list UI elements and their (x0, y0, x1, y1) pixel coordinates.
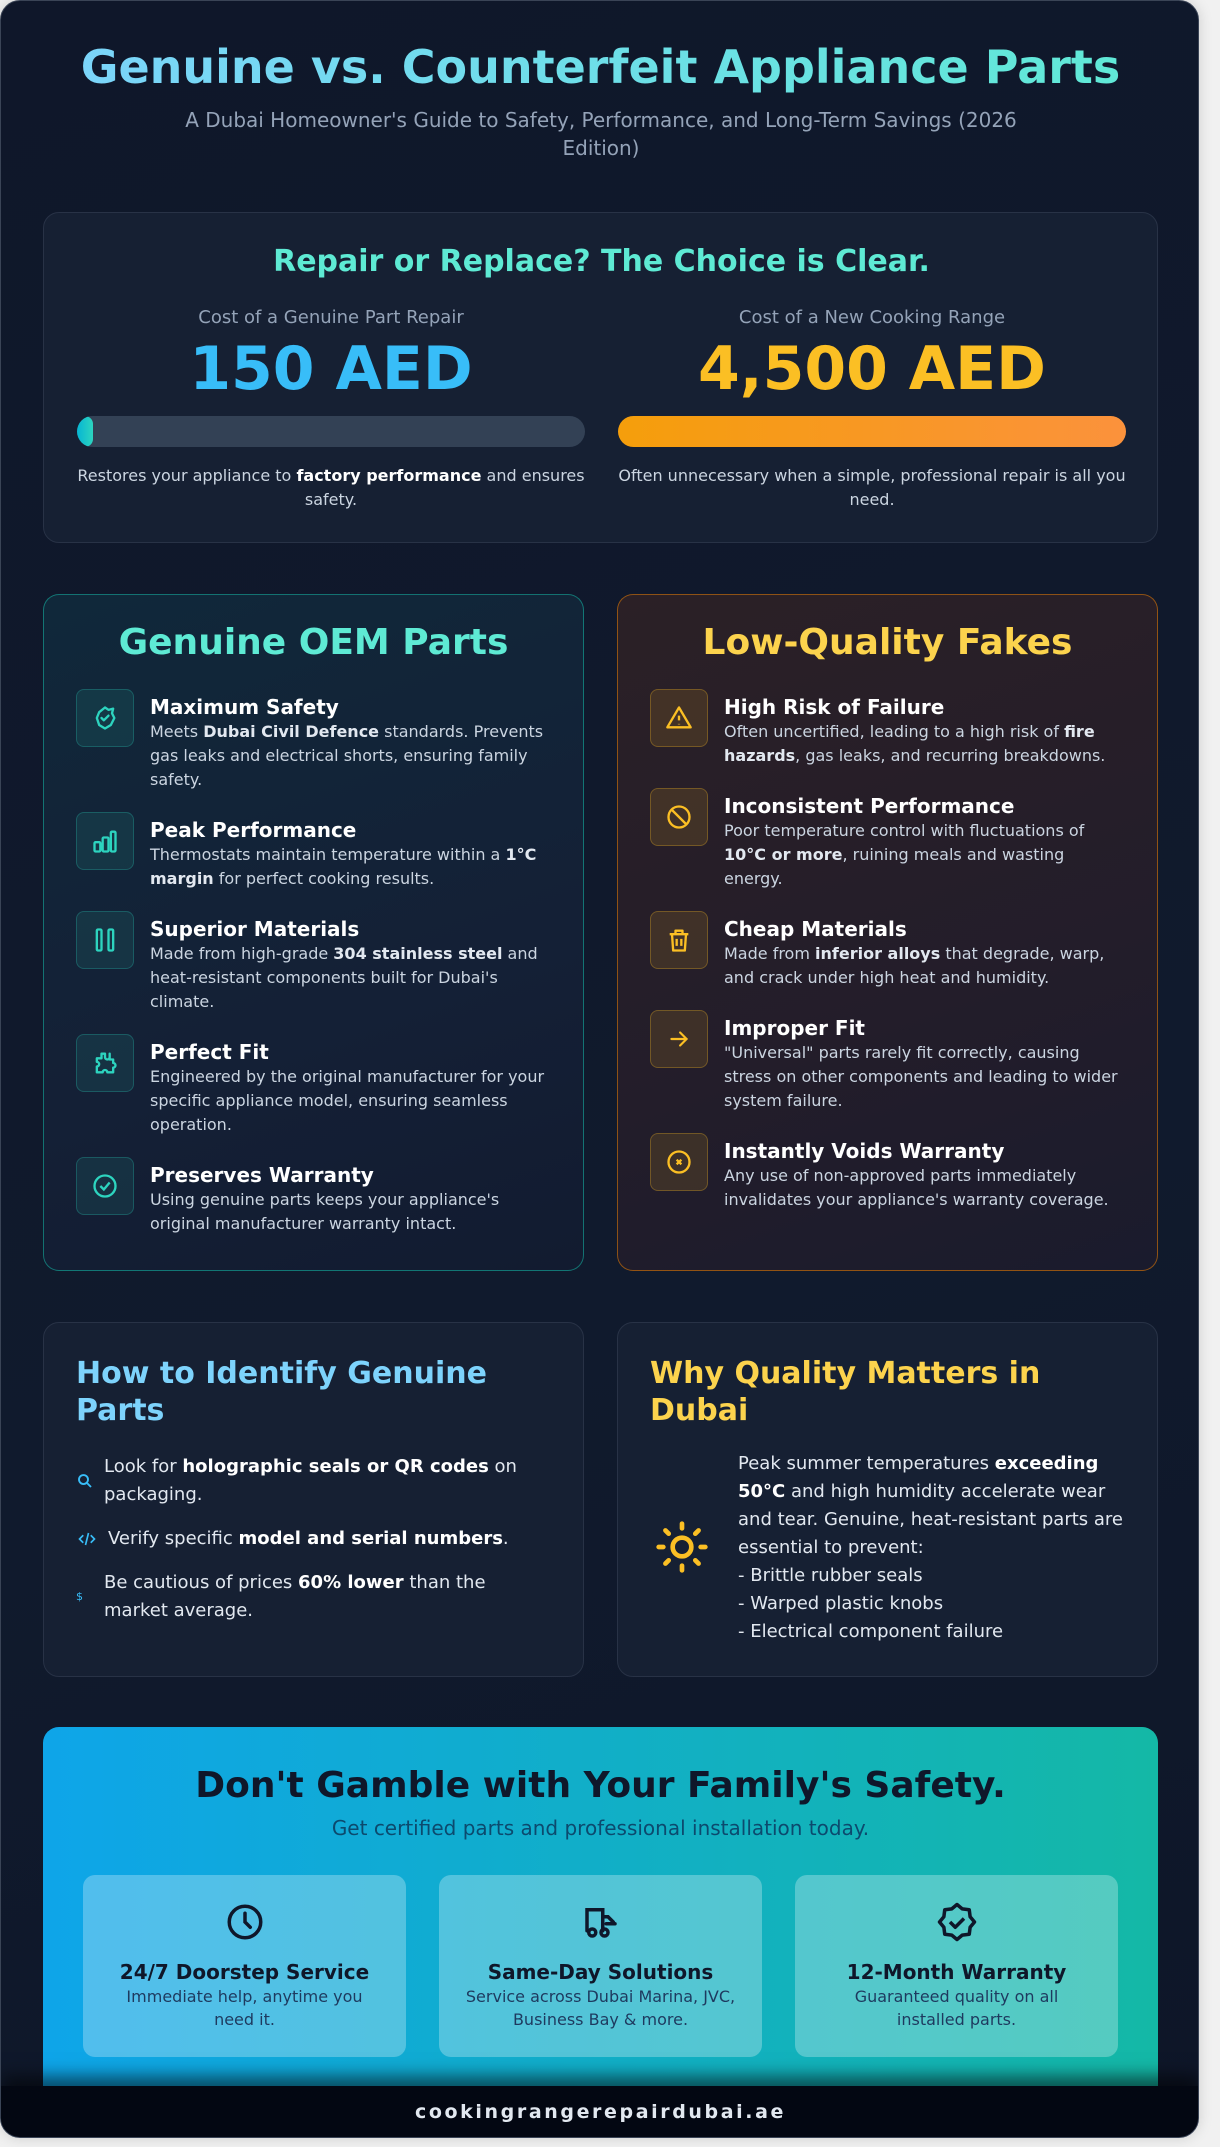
item: high risk: Often uncertified, leading to a high risk of fire hazards, gas leaks, and recurring breakdowns. (724, 722, 1105, 765)
column: genuine repair cost: Cost of a Genuine Part Repair (198, 307, 464, 328)
list item: serial numbers: Verify specific model and serial numbers. (108, 1528, 509, 1549)
card: doorstep service (83, 1875, 406, 2057)
item: cheap materials: Made from inferior alloys that degrade, warp, and crack under high heat and humidity. (724, 944, 1104, 987)
item: improper fit (650, 1010, 1118, 1110)
item: maximum safety (76, 689, 543, 789)
list item: seals: Look for holographic seals or QR codes on packaging. (104, 1456, 517, 1505)
item: inconsistent performance: Poor temperature control with fluctuations of 10°C or more, ruining meals and wasting energy. (724, 821, 1084, 888)
item: cheap materials: Cheap Materials (724, 917, 907, 941)
card: same-day: Service across Dubai Marina, JVC, Business Bay & more. (466, 1987, 735, 2029)
item: cheap materials (650, 911, 1104, 987)
heading: why quality: Why Quality Matters in Dubai (650, 1356, 1040, 1428)
item: voids warranty (650, 1133, 1109, 1209)
panel: call to action (43, 1727, 1158, 2107)
column: new range cost: Cost of a New Cooking Range (739, 307, 1005, 328)
subheading: CTA: Get certified parts and professional installation today. (332, 1816, 869, 1840)
item: high risk: High Risk of Failure (724, 695, 944, 719)
card: same-day: Same-Day Solutions (488, 1960, 713, 1984)
item: inconsistent performance (650, 788, 1085, 888)
item: maximum safety: Meets Dubai Civil Defence standards. Prevents gas leaks and electrical shorts, ensuring family safety. (150, 722, 543, 789)
icon: badge check (938, 1902, 976, 1942)
text: heat explanation (738, 1453, 1123, 1642)
item: high risk (650, 689, 1105, 765)
bar: repair cost (77, 416, 585, 447)
heading: identify: How to Identify Genuine Parts (76, 1356, 487, 1428)
text: heat explanation: - Electrical component failure (738, 1621, 1003, 1642)
icon: truck (585, 1908, 617, 1938)
item: perfect fit (76, 1034, 544, 1134)
heading: genuine: Genuine OEM Parts (119, 622, 508, 663)
item: peak performance (76, 812, 536, 888)
text: heat explanation: Peak summer temperatures exceeding 50°C and high humidity accelerate wear and tear. Genuine, heat-resistant parts are essential to prevent: (738, 1453, 1123, 1558)
list item: prices: $ (76, 1590, 83, 1603)
text: heat explanation: - Brittle rubber seals (738, 1565, 923, 1586)
column: genuine repair cost: Restores your appliance to factory performance and ensures safety. (77, 466, 585, 509)
column: new range cost: Often unnecessary when a simple, professional repair is all you need. (618, 466, 1126, 509)
item: superior materials: Made from high-grade 304 stainless steel and heat-resistant components built for Dubai's climate. (150, 944, 538, 1011)
card: doorstep service: 24/7 Doorstep Service (120, 1960, 369, 1984)
item: peak performance: Peak Performance (150, 818, 356, 842)
panel: low-quality fakes (617, 594, 1158, 1271)
heading: repair or replace: Repair or Replace? The Choice is Clear. (273, 244, 930, 279)
item: preserves warranty: Using genuine parts keeps your appliance's original manufacturer warranty intact. (150, 1190, 499, 1233)
item: improper fit: "Universal" parts rarely fit correctly, causing stress on other components and leading to wider system failure. (724, 1043, 1118, 1110)
item: superior materials (76, 911, 538, 1011)
panel: how to identify (43, 1322, 584, 1677)
column: genuine repair cost (77, 307, 585, 509)
item: voids warranty: Instantly Voids Warranty (724, 1139, 1004, 1163)
panel: why quality matters (617, 1322, 1158, 1677)
title: Genuine vs. Counterfeit Appliance Parts (81, 40, 1120, 94)
column: new range cost (618, 307, 1126, 509)
text: heat explanation: - Warped plastic knobs (738, 1593, 943, 1614)
icon: sun (656, 1521, 708, 1573)
item: voids warranty: Any use of non-approved parts immediately invalidates your appliance's warranty coverage. (724, 1166, 1109, 1209)
item: improper fit: Improper Fit (724, 1016, 865, 1040)
panel: genuine OEM parts (43, 594, 584, 1271)
column: new range cost: 4,500 AED (698, 334, 1046, 404)
panel: repair or replace (43, 212, 1158, 543)
list item: prices: Be cautious of prices 60% lower than the market average. (104, 1572, 486, 1621)
card: warranty (795, 1875, 1118, 2057)
card: warranty: 12-Month Warranty (847, 1960, 1066, 1984)
subtitle: A Dubai Homeowner's Guide to Safety, Performance, and Long-Term Savings (2026 Edition) (185, 108, 1017, 160)
heading: CTA: Don't Gamble with Your Family's Safety. (195, 1765, 1006, 1806)
card: same-day (439, 1875, 762, 2057)
footer: cookingrangerepairdubai.ae (415, 2101, 786, 2123)
bar: replacement cost (618, 416, 1126, 447)
heading: fakes: Low-Quality Fakes (703, 622, 1072, 663)
icon: clock (228, 1904, 262, 1940)
item: preserves warranty (76, 1157, 499, 1233)
card: warranty: Guaranteed quality on all installed parts. (855, 1987, 1058, 2029)
item: peak performance: Thermostats maintain temperature within a 1°C margin for perfect cooking results. (150, 845, 536, 888)
item: preserves warranty: Preserves Warranty (150, 1163, 374, 1187)
item: perfect fit: Perfect Fit (150, 1040, 269, 1064)
item: superior materials: Superior Materials (150, 917, 359, 941)
item: perfect fit: Engineered by the original manufacturer for your specific appliance model, ensuring seamless operation. (150, 1067, 544, 1134)
column: genuine repair cost: 150 AED (189, 334, 473, 404)
card: doorstep service: Immediate help, anytime you need it. (126, 1987, 363, 2029)
item: inconsistent performance: Inconsistent Performance (724, 794, 1014, 818)
footer (1, 2086, 1200, 2139)
item: maximum safety: Maximum Safety (150, 695, 339, 719)
